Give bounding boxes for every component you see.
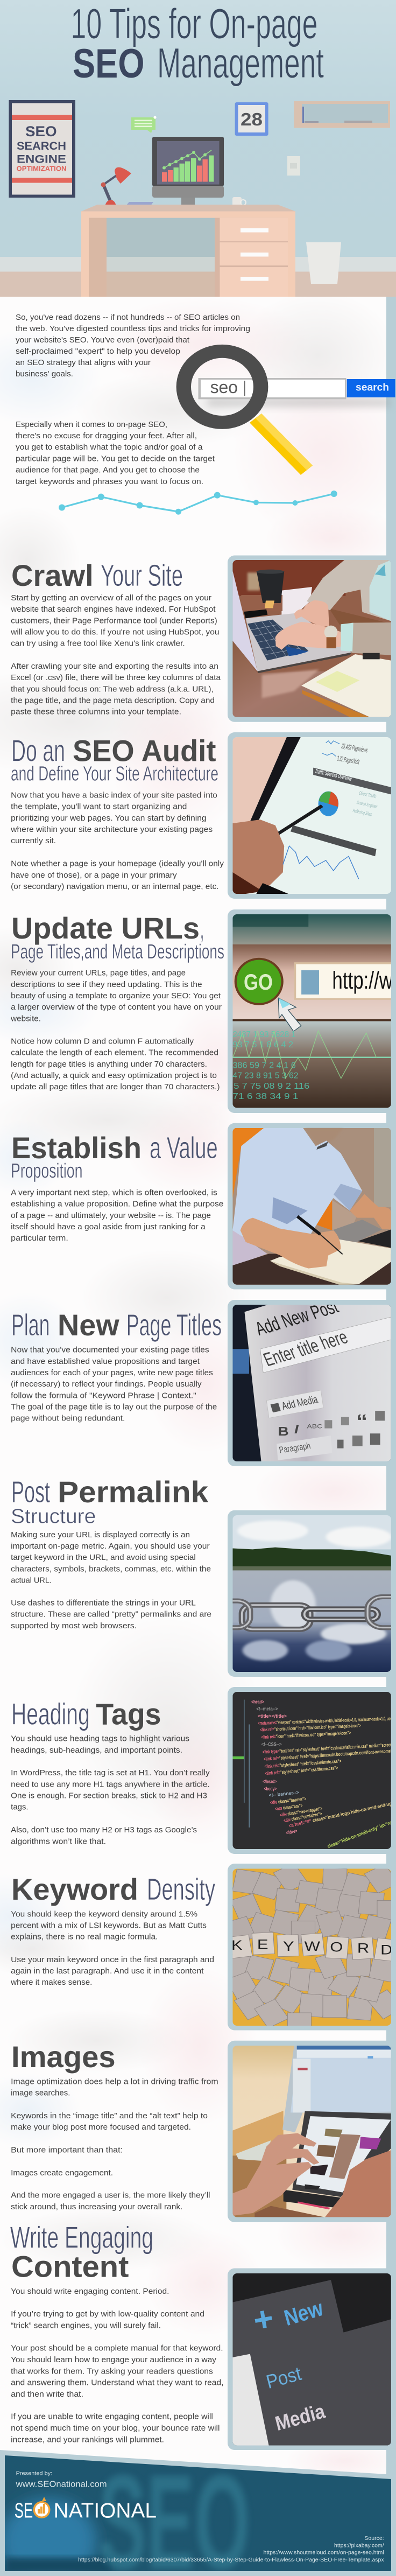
heading — [11, 1475, 209, 1528]
photo: HTML source code: <body> — [264, 1787, 277, 1792]
intro paragraph two: particular page will be. You get to decide on the target — [16, 454, 215, 463]
photo: add new post editor: Paragraph — [278, 1440, 312, 1455]
tip 2: SEO audit — [10, 732, 396, 899]
body text: website that search engines have indexed. For HubSpot — [10, 605, 215, 614]
mug — [232, 197, 246, 205]
heading: Page Titles,and Meta Descriptions — [11, 941, 224, 963]
body text: audiences for each of your pages, write new page titles — [11, 1369, 213, 1377]
image frame — [228, 732, 396, 899]
logo: SEO National: SE — [15, 2500, 33, 2522]
body text: where it makes sense. — [10, 1978, 92, 1987]
heading: Plan — [11, 1308, 49, 1342]
keyword letters: D — [380, 1942, 393, 1957]
body text — [11, 2287, 223, 2444]
photo: HTML source code: <!--meta--> — [257, 1706, 278, 1712]
icon: chat bubble — [131, 116, 157, 133]
chart bars — [162, 156, 214, 182]
body text: You should learn how to engage your audience in a way — [11, 2356, 217, 2364]
body text: will allow you to do this. If you're not using HubSpot, you — [10, 628, 220, 636]
body text: that works for them. Try asking your readers questions — [11, 2367, 213, 2376]
image frame — [228, 1687, 396, 1854]
poster: SEO search engine optimization: OPTIMIZATION — [16, 165, 67, 172]
heading: Establish — [11, 1131, 142, 1165]
photo: HTML source code: </head> — [263, 1779, 277, 1784]
body text: explains, there is no real magic formula. — [11, 1933, 158, 1942]
right side strip — [386, 297, 396, 2576]
body text — [10, 792, 224, 891]
intro paragraph two: there's no excuse for dragging your feet. After all, — [16, 432, 197, 440]
body text: Note whether a page is your homepage (ideally you'll only — [11, 860, 224, 869]
heading: Keyword — [11, 1872, 138, 1906]
body text: Images create engagement. — [11, 2169, 113, 2178]
body text: website. — [10, 1014, 41, 1023]
body text: If you are unable to write engaging content, people will — [11, 2413, 213, 2421]
search bar: seo — [210, 377, 238, 397]
photo: analytics dashboard on tablet — [232, 737, 391, 896]
body text: (And actually, a quick and easy optimization project is to — [11, 1072, 217, 1080]
body text: “trick” search engines, you will surely fail. — [11, 2322, 161, 2330]
body text: follow the formula of "Keyword Phrase | Context." — [11, 1391, 196, 1400]
intro paragraph one — [16, 313, 250, 379]
body text: You should use heading tags to highlight various — [11, 1735, 189, 1744]
body text: Review your current URLs, page titles, and page — [11, 969, 186, 978]
tip 5: plan new page titles — [11, 1296, 396, 1466]
calendar showing 28: 28 — [241, 109, 263, 129]
keyword letters: E — [257, 1937, 268, 1952]
heading: Post — [11, 1475, 50, 1509]
heading: , — [200, 911, 204, 946]
body text: of a page -- and ultimately, your website -- is. The page — [11, 1212, 211, 1220]
heading — [10, 2221, 153, 2284]
photo: new post and media menu: + — [251, 2299, 277, 2340]
calendar showing 28 — [235, 102, 268, 136]
photo: browser address bar with GO button: 5 7 75 08 9 2 116 — [234, 1081, 309, 1090]
sources: Source: — [364, 2535, 384, 2542]
body text: But more important than that: — [11, 2146, 123, 2155]
body text: again in the last paragraph. And use it in the content — [11, 1967, 203, 1976]
body text: can try using a free tool like Xenu's link crawler. — [11, 640, 185, 648]
heading — [11, 733, 218, 785]
photo: new post and media menu: New — [281, 2295, 326, 2330]
photo: analytics dashboard on tablet: Referring Sites — [352, 808, 373, 817]
body text: important on-page metric. Again, you should use your — [11, 1542, 210, 1551]
wall shelf — [294, 101, 390, 128]
intro paragraph one: the web. You've digested countless tips and tricks for improving — [16, 325, 250, 333]
photo: hands browsing on a tablet — [232, 2046, 391, 2218]
photo: add new post editor: Add Media — [280, 1393, 320, 1412]
keyword letters: O — [330, 1939, 343, 1955]
title — [73, 8, 324, 86]
light switch — [287, 156, 300, 176]
photo: browser address bar with GO button: 386 59 7 2 4 1 6 — [232, 1060, 296, 1070]
body text: Your post should be a complete manual for that keyword. — [11, 2344, 223, 2353]
tip 10: write engaging content — [10, 2221, 396, 2450]
heading — [11, 1872, 215, 1907]
intro paragraph one: an SEO strategy that aligns with your — [16, 359, 151, 367]
keyword letters: W — [305, 1938, 320, 1954]
body text: descriptions to see if they need updating. This is the — [11, 981, 202, 989]
body text: the page title, and the page meta description. Copy and — [11, 697, 215, 705]
heading: Density — [147, 1872, 215, 1907]
heading: Permalink — [58, 1475, 209, 1509]
image frame — [228, 1864, 396, 2030]
photo: new post and media menu — [232, 2273, 391, 2447]
body text — [10, 1910, 214, 1987]
image frame — [228, 909, 396, 1113]
body text: The goal of the page title is to lay out the purpose of the — [11, 1403, 217, 1411]
heading — [11, 558, 183, 593]
hero illustration with title — [0, 0, 396, 297]
body text: need to use any more H1 tags anywhere in the article. — [11, 1780, 210, 1789]
heading: Heading — [11, 1697, 90, 1732]
image frame — [228, 556, 396, 722]
body text — [11, 1188, 223, 1243]
body text: increase, and your rankings will plummet. — [11, 2435, 164, 2444]
decorative line chart — [59, 491, 337, 515]
body text: not spend much time on your blog, your bounce rate will — [11, 2424, 220, 2433]
heading: a Value — [150, 1131, 218, 1165]
tip 1: crawl your site — [10, 556, 396, 722]
body text: You should write engaging content. Period. — [11, 2287, 169, 2296]
photo: browser address bar with GO button: 71 6 38 34 9 1 — [232, 1091, 298, 1101]
drawer handles — [241, 228, 268, 281]
heading — [11, 911, 224, 963]
photo: HTML source code — [232, 1692, 396, 1853]
keyword letters: K — [231, 1937, 243, 1952]
body text: One is enough. For section breaks, stick to H2 and H3 — [11, 1792, 207, 1801]
photo: HTML source code: <head> — [251, 1699, 264, 1705]
presented by — [16, 2470, 107, 2489]
heading: Update URLs — [11, 911, 200, 945]
body text: supported by most web browsers. — [11, 1622, 137, 1630]
intro paragraph two: you get to establish what the topic and/or goal of a — [16, 443, 203, 452]
poster: SEO search engine optimization: SEO — [25, 123, 57, 139]
body text: make your blog post more focused and targeted. — [11, 2123, 191, 2132]
body text: (or secondary) navigation menu, or an internal page, etc. — [11, 883, 219, 891]
body text: Notice how column D and column F automatically — [11, 1037, 194, 1046]
body text: a larger overview of the type of content you have on your — [11, 1003, 222, 1012]
heading: SEO Audit — [73, 733, 216, 767]
intro section — [16, 313, 395, 515]
body text: Now that you've documented your existing page titles — [11, 1346, 209, 1355]
body text: have one of those), or a page in your primary — [11, 871, 177, 880]
keyword letters: Y — [283, 1938, 294, 1954]
photo: chain link over lake — [215, 1514, 396, 1673]
photo: HTML source code: <link rel="stylesheet" href="css/theme.css"> — [265, 1766, 338, 1776]
body text: the template, you'll want to start organizing and — [11, 803, 187, 811]
heading: Proposition — [11, 1160, 83, 1182]
body text: target keyword in the URL, and avoid using special — [11, 1553, 196, 1562]
body text — [11, 1531, 211, 1630]
body text: In WordPress, the title tag is set at H1. You don’t really — [11, 1769, 210, 1777]
photo: browser address bar with GO button: 47 23 8 91 5 3 62 — [232, 1070, 298, 1080]
body text: A very important next step, which is often overlooked, is — [11, 1188, 217, 1197]
body text — [11, 1346, 217, 1423]
search bar — [198, 377, 395, 399]
monitor with rising bar chart — [152, 137, 224, 208]
poster: SEO search engine optimization — [9, 100, 75, 198]
body text: Keywords in the “image title” and the “alt text” help to — [11, 2112, 208, 2120]
keyword letters — [231, 1937, 393, 1957]
body text: If you’re trying to get by with low-quality content and — [11, 2310, 204, 2319]
photo: HTML source code: </div> — [286, 1829, 298, 1836]
heading: Tags — [96, 1697, 161, 1731]
tip 7: heading tags — [11, 1687, 396, 1854]
body text: And the more engaged a user is, the more likely they’ll — [11, 2191, 210, 2200]
intro paragraph two: audience for that page. And you get to choose the — [16, 466, 200, 475]
body text — [10, 969, 222, 1091]
intro paragraph one: business' goals. — [16, 370, 73, 379]
body text: currently sit. — [11, 837, 56, 845]
photo: HTML source code: <div class="banner"> — [270, 1796, 307, 1806]
sources: https://pixabay.com/ — [334, 2543, 384, 2549]
heading: Content — [11, 2250, 129, 2284]
photo: HTML source code: <!--CSS--> — [261, 1742, 281, 1747]
photo: man writing in a notebook — [232, 1128, 391, 1285]
intro paragraph two: target keywords and phrases you want to focus on. — [16, 478, 203, 486]
body text: Now that you have a basic index of your site pasted into — [11, 792, 217, 800]
body text: headings, sub-headings, and important points. — [11, 1746, 182, 1755]
photo: HTML source code: <div class="nav-wrapper"> — [279, 1806, 323, 1818]
logo: SEO National: NATIONAL — [54, 2500, 157, 2522]
intro paragraph one: your website's SEO. You've even (over)paid that — [16, 336, 189, 345]
keyword letters: R — [357, 1940, 369, 1956]
photo: new post and media menu: Post — [264, 2362, 303, 2393]
heading: and Define Your Site Architecture — [11, 762, 218, 785]
body text: image searches. — [11, 2089, 70, 2098]
photo: add new post editor: ABC — [307, 1423, 322, 1430]
body text — [10, 594, 221, 717]
body text: algorithms won’t like that. — [11, 1837, 106, 1846]
desk — [81, 205, 295, 297]
body text: Making sure your URL is displayed correctly is an — [11, 1531, 190, 1539]
photo: hands typing on laptop — [232, 560, 391, 717]
heading — [11, 1131, 218, 1182]
intro paragraph one: self-proclaimed "expert" to help you develop — [16, 347, 180, 356]
photo: browser address bar with GO button: GO — [244, 970, 273, 995]
heading: Page Titles — [126, 1308, 222, 1342]
body text: customers, their Page Performance tool (under Reports) — [11, 617, 217, 625]
photo: browser address bar with GO button — [232, 914, 393, 1109]
photo: add new post editor: Add New Post — [252, 1296, 342, 1340]
photo: browser address bar with GO button: 93 7 5 1 8 6 4 2 — [232, 1040, 293, 1049]
body text: calculate the length of each element. The recommended — [11, 1049, 218, 1058]
body text: tags. — [11, 1803, 29, 1812]
body text: actual URL. — [11, 1577, 52, 1585]
heading: Structure — [11, 1505, 96, 1528]
body text: Use your main keyword once in the first paragraph and — [11, 1956, 214, 1964]
body text: Image optimization does help a lot in driving traffic from — [11, 2077, 218, 2086]
body text: and have established value propositions and target — [11, 1357, 200, 1366]
image frame — [228, 2268, 396, 2450]
heading: Your Site — [101, 558, 183, 593]
heading: Crawl — [11, 558, 94, 592]
presented by: Presented by: — [16, 2470, 52, 2477]
footer — [0, 2447, 396, 2576]
photo: HTML source code: <title></title> — [258, 1714, 287, 1719]
poster: SEO search engine optimization: ENGINE — [17, 152, 66, 165]
body text: particular term. — [11, 1234, 68, 1243]
body text: You should keep the keyword density around 1.5% — [11, 1910, 197, 1919]
photo: HTML source code: <link rel="stylesheet" href="/css/animate.css"> — [264, 1759, 342, 1769]
tip 8: keyword density — [10, 1863, 396, 2035]
search bar: search — [356, 382, 389, 393]
image frame — [228, 1510, 396, 1677]
waste bin — [306, 242, 341, 284]
body text: Start by getting an overview of all of the pages on your — [11, 594, 211, 603]
body text: and answering them. Understand what they want to read, — [11, 2379, 223, 2388]
photo: analytics dashboard on tablet: Direct Traffic — [358, 790, 377, 800]
body text: paste these three columns into your template. — [11, 708, 181, 717]
body text: stick around, thus increasing your overall rank. — [11, 2203, 182, 2211]
photo: scrabble tiles spelling keyword — [224, 1863, 396, 2035]
photo: new post and media menu: Media — [273, 2399, 327, 2435]
photo: add new post editor: B — [278, 1425, 289, 1438]
body text: characters, symbols, brackets, commas, etc. within the — [11, 1565, 211, 1573]
tip 9: images — [11, 2040, 396, 2222]
body text: that you should focus on: The web address (a.k.a. URL), — [11, 685, 214, 694]
body text: Use dashes to differentiate the strings in your URL — [11, 1599, 196, 1608]
body text: itself should have a goal aside from just ranking for a — [11, 1223, 206, 1231]
body text — [11, 2077, 218, 2211]
tip 3: update URLs — [10, 909, 396, 1113]
image frame — [228, 1123, 396, 1289]
body text: structure. These are called “pretty” permalinks and are — [11, 1611, 211, 1619]
photo: add new post editor: “ — [356, 1411, 367, 1432]
photo: add new post editor — [232, 1296, 391, 1464]
body text: beauty of using a template to organize your SEO: You get — [11, 992, 221, 1000]
photo: HTML source code: <nav class="nav"> — [274, 1803, 303, 1812]
photo: add new post editor: I — [294, 1423, 299, 1437]
logo: SEO National — [15, 2497, 157, 2522]
tip 6: post permalink structure — [11, 1475, 396, 1677]
heading: Do an — [11, 733, 65, 768]
image frame — [228, 1300, 396, 1466]
heading: Write Engaging — [10, 2221, 153, 2255]
body text: After crawling your site and exporting the results into an — [11, 662, 218, 671]
body text: percent with a mix of LSI keywords. But as Matt Cutts — [11, 1921, 207, 1930]
poster: SEO search engine optimization: SEARCH — [17, 139, 66, 152]
icon: magnifying glass — [176, 345, 313, 475]
desk lamp — [101, 167, 131, 208]
body text: establishing a value proposition. Define what the purpose — [11, 1200, 223, 1209]
body text: and then write that. — [11, 2390, 83, 2399]
tip 4: establish a value proposition — [11, 1123, 396, 1289]
presented by: www.SEOnational.com — [16, 2480, 107, 2489]
heading: New — [58, 1308, 119, 1342]
photo: HTML source code: <!-- banner--> — [268, 1790, 299, 1798]
body text: (if necessary) to reflect your findings. People usually — [11, 1380, 202, 1389]
photo: browser address bar with GO button: 2487 1 93 5628 1 — [232, 1030, 296, 1039]
title: SEO — [73, 41, 144, 87]
photo: HTML source code: <div class="container"> — [283, 1811, 323, 1824]
sources — [78, 2535, 384, 2563]
heading: Images — [11, 2040, 116, 2074]
body text: Excel (or .csv) file, there will be three key columns of data — [11, 674, 221, 682]
body text — [11, 1735, 210, 1846]
body text: where within your site architecture your existing pages — [10, 825, 213, 834]
body text: page without being redundant. — [11, 1415, 125, 1423]
intro paragraph two: Especially when it comes to on-page SEO, — [16, 421, 167, 429]
body text: prioritizing your web pages. You can start by defining — [11, 814, 207, 823]
body text: length for page titles is anything under 70 characters. — [11, 1060, 207, 1069]
heading — [11, 1308, 222, 1342]
body text: Also, don’t use too many H2 or H3 tags as Google’s — [11, 1826, 197, 1835]
sources: https://blog.hubspot.com/blog/tabid/6307/bid/33655/A-Step-by-Step-Guide-to-Flawless-On-Page-SEO-Free-Template.aspx — [78, 2557, 384, 2563]
search bar shadow — [207, 398, 390, 406]
chart trend line — [162, 150, 211, 170]
books — [127, 202, 153, 205]
body text: update all page titles that are longer than 70 characters.) — [11, 1083, 220, 1091]
sources: https://www.shoutmeloud.com/on-page-seo.html — [263, 2550, 384, 2556]
intro paragraph two — [16, 421, 215, 486]
image frame — [228, 2041, 396, 2222]
intro paragraph one: So, you've read dozens -- if not hundreds -- of SEO articles on — [16, 313, 240, 322]
